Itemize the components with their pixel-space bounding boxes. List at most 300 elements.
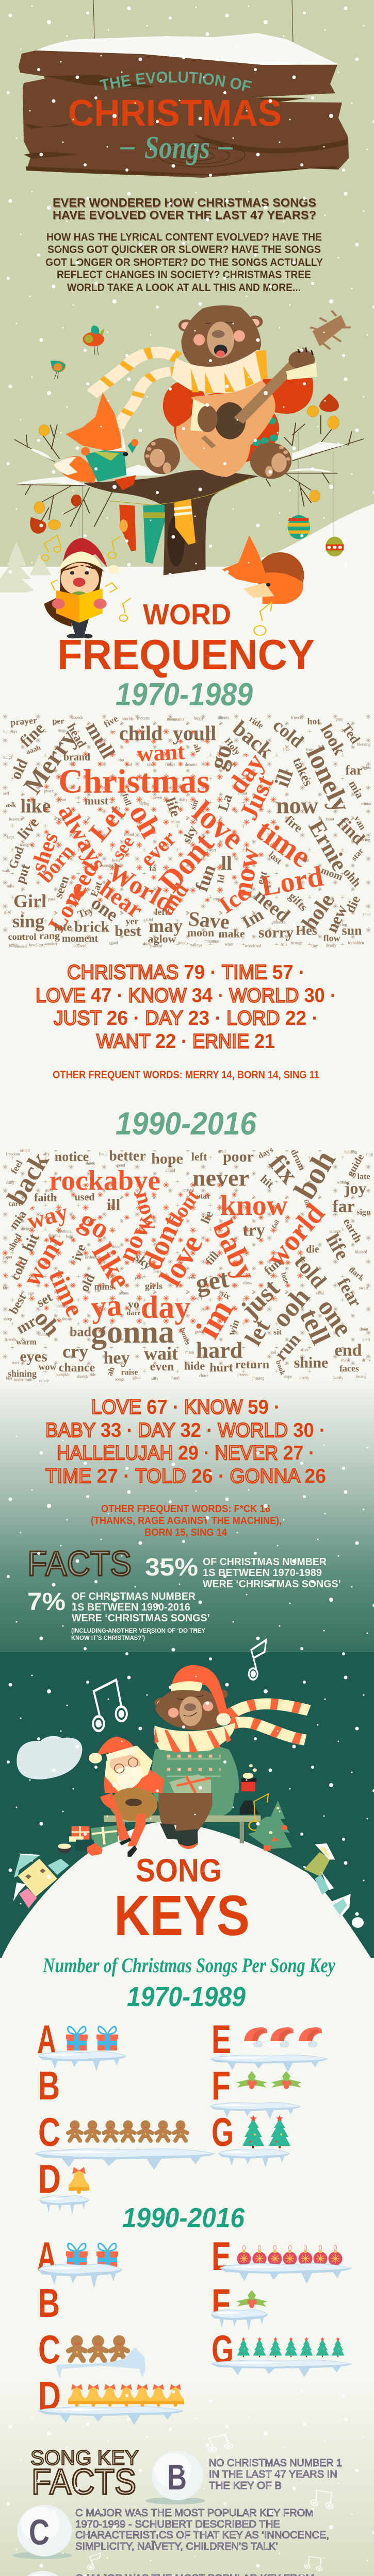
small filler words: mother	[46, 942, 58, 946]
small filler words: hold	[9, 943, 17, 948]
small filler words: strange	[290, 941, 303, 945]
word cloud 1990-2016: far	[332, 1197, 355, 1216]
small filler words: family	[333, 1376, 343, 1380]
word cloud 1990-2016: late	[357, 1173, 370, 1181]
word cloud 1970-1989: head	[64, 721, 89, 750]
wooden board	[19, 50, 349, 178]
word cloud 1990-2016: im	[189, 1293, 240, 1345]
small filler words: wondered	[245, 944, 261, 948]
small filler words: christmas	[204, 939, 219, 944]
word cloud 1970-1989: God	[6, 844, 27, 871]
word cloud 1990-2016: bad	[70, 1324, 91, 1340]
small filler words: salute	[39, 1379, 49, 1383]
small filler words: sweet	[207, 848, 217, 852]
word cloud 1970-1989: old	[7, 756, 31, 782]
word cloud 1990-2016: left	[191, 1150, 207, 1163]
word cloud 1990-2016: way	[24, 1198, 71, 1234]
stat: 7%: (INCLUDING ANOTHER VERSION OF ‘DO THEY	[71, 1627, 205, 1634]
small filler words: silence	[330, 1229, 342, 1233]
small filler words: daisy	[179, 798, 187, 802]
small filler words: ally	[43, 1152, 50, 1156]
sleeping fox	[222, 535, 304, 604]
falling snow over top section	[0, 0, 374, 574]
small filler words: sail	[270, 1350, 277, 1355]
word cloud 1990-2016: used	[75, 1192, 94, 1203]
word cloud 1990-2016: baby	[206, 1215, 263, 1286]
stat: 35%: 1S BETWEEN 1970-1989	[203, 1567, 322, 1579]
snow cap on sign	[36, 33, 337, 65]
word cloud 1990-2016: care	[8, 1200, 22, 1208]
word cloud 1990-2016: shed	[6, 1232, 23, 1252]
word cloud 1990-2016: cold	[7, 1254, 31, 1282]
small filler words: tho	[119, 757, 124, 762]
word cloud 1970-1989: put	[12, 862, 33, 886]
key chart 1990-2016	[37, 2233, 352, 2425]
word cloud 1970-1989: go	[204, 740, 238, 773]
key B: none: B	[38, 2063, 60, 2108]
stat: 7%: 7%	[27, 1588, 66, 1616]
snowball C and fact: CHARACTERISTICS OF THAT KEY AS ‘INNOCENCE,	[75, 2530, 329, 2541]
snowball B and fact: IN THE LAST 47 YEARS IN	[209, 2469, 337, 2480]
small filler words: shine	[143, 942, 152, 946]
word cloud 1970-1989: Dont	[152, 826, 220, 899]
small filler words: dreams	[185, 762, 197, 767]
stat: 35%	[145, 1554, 341, 1590]
word cloud 1990-2016: die	[306, 1244, 319, 1255]
faint background trees	[0, 541, 51, 592]
small filler words: sits	[147, 762, 152, 767]
small filler words: cry	[75, 795, 80, 800]
stat: 35%: 35%	[145, 1554, 198, 1581]
key F: 1 holly	[211, 2280, 268, 2331]
word cloud 1990-2016: day	[141, 1290, 190, 1325]
word cloud 1990-2016: win	[225, 1318, 242, 1337]
small filler words: beloved	[73, 944, 87, 948]
small filler words: hall	[281, 942, 287, 947]
small filler words: presents	[272, 920, 285, 924]
word cloud 1970-1989: aaah	[25, 744, 42, 756]
top word counts 1990-2016: HALLELUJAH 29 · NEVER 27 ·	[57, 1442, 315, 1464]
small filler words: shields	[77, 1375, 88, 1379]
cocoa mug	[241, 1778, 255, 1791]
word cloud 1990-2016: ill	[107, 1195, 120, 1214]
word cloud 1990-2016: dont	[136, 1210, 188, 1275]
bare branches	[14, 415, 364, 527]
word cloud 1970-1989: brand	[63, 752, 90, 763]
small filler words: stars	[12, 1360, 19, 1365]
other frequent words 1970-1989: OTHER FREQUENT WORDS: MERRY 14, BORN 14, SING 11	[53, 1069, 319, 1081]
small filler words: hand	[171, 1376, 180, 1381]
small filler words: cold	[363, 1337, 370, 1342]
intro paragraph	[45, 231, 323, 294]
small filler words: true	[306, 747, 313, 752]
word cloud 1990-2016: fear	[333, 1275, 365, 1311]
title: The Evolution of Christmas Songs: Songs	[144, 130, 210, 165]
word cloud 1990-2016: one	[313, 1293, 358, 1342]
snowball C and fact: C MAJOR WAS THE MOST POPULAR KEY FROM	[75, 2507, 314, 2519]
bench	[104, 1816, 261, 1822]
word cloud 1970-1989: ask	[6, 802, 16, 809]
key G: 7 trees: G	[212, 2327, 234, 2372]
word cloud 1970-1989: aglow	[148, 933, 176, 945]
heading: song key facts	[30, 2447, 139, 2502]
word cloud 1990-2016: hit	[20, 1231, 42, 1255]
small filler words: rings	[58, 728, 66, 733]
word cloud 1970-1989: day	[222, 749, 271, 799]
small filler words: pumpkin	[56, 1372, 70, 1377]
word cloud 1970-1989: may	[149, 916, 183, 936]
stat: 7%	[27, 1588, 210, 1641]
word cloud 1990-2016: hey	[103, 1349, 130, 1367]
word cloud 1990-2016: ah	[105, 1366, 117, 1377]
word cloud 1990-2016: best	[7, 1292, 29, 1316]
small filler words: fears	[153, 1269, 161, 1274]
small filler words: true	[214, 896, 220, 902]
word cloud 1970-1989: late	[54, 920, 72, 934]
word cloud 1970-1989: fire	[282, 814, 305, 836]
small filler words: bright	[299, 858, 310, 862]
word cloud 1990-2016: just	[235, 1273, 285, 1324]
guitar	[176, 379, 275, 477]
scarf streamers	[229, 1704, 309, 1715]
year label 1990-2016: 1990-2016	[116, 1106, 256, 1142]
word cloud 1970-1989: oh	[123, 798, 168, 843]
small filler words: gold	[195, 1329, 202, 1334]
fox on branch	[54, 456, 98, 483]
word cloud 1970-1989: moon	[187, 926, 214, 939]
small filler words	[3, 1148, 372, 1383]
small filler words: blessed	[355, 1250, 367, 1254]
intro paragraph: SONGS GOT QUICKER OR SLOWER? HAVE THE SONGS	[47, 244, 321, 256]
small filler words: self	[3, 791, 9, 795]
other frequent words 1990-2016: (THANKS, RAGE AGAINST THE MACHINE),	[91, 1515, 282, 1527]
word cloud 1970-1989: born	[34, 840, 79, 887]
title: The Evolution of Christmas Songs: THE EVOLUTION OF	[99, 71, 252, 91]
word cloud 1990-2016: tell	[294, 1304, 335, 1349]
word cloud 1990-2016: world	[260, 1197, 331, 1274]
small filler words: forbidden	[348, 941, 364, 945]
small filler words: fire	[95, 1288, 101, 1293]
snowball B and fact	[145, 2451, 342, 2504]
word cloud 1970-1989: one	[87, 892, 122, 925]
word cloud 1990-2016: shine	[294, 1354, 328, 1371]
small filler words: sailed	[20, 1148, 29, 1153]
word cloud 1970-1989: Christmas	[58, 762, 210, 801]
small filler words: dawn	[57, 798, 67, 802]
small filler words: loveliest	[29, 943, 43, 947]
word cloud 1970-1989: love	[186, 794, 251, 856]
word cloud 1970-1989: now	[276, 792, 318, 818]
stat: 7%: KNOW IT’S CHRISTMAS?’)	[71, 1634, 145, 1641]
word cloud 1970-1989: youll	[173, 721, 216, 745]
key B: none: B	[38, 2280, 60, 2326]
word cloud 1970-1989: full	[120, 792, 133, 807]
word cloud 1990-2016: star	[197, 1192, 210, 1200]
word cloud 1990-2016: end	[335, 1341, 362, 1360]
word cloud 1990-2016: yo	[128, 1297, 139, 1311]
word cloud 1990-2016: go	[74, 1204, 115, 1246]
small filler words: steady	[178, 941, 188, 945]
small filler words: friends	[5, 1337, 16, 1342]
intro question	[53, 196, 316, 222]
small filler words: dancing	[357, 838, 370, 842]
small filler words: mothers	[58, 1229, 71, 1233]
word cloud 1990-2016: now	[131, 1189, 164, 1233]
word cloud 1990-2016: ive	[69, 1242, 89, 1263]
word cloud 1970-1989: sing	[12, 911, 44, 931]
word cloud 1970-1989: ah	[191, 742, 203, 754]
bear head and hat	[155, 1698, 168, 1708]
word cloud 1990-2016: sit	[273, 1328, 282, 1336]
word cloud 1990-2016: never	[192, 1164, 249, 1191]
word cloud 1990-2016: book	[274, 1360, 286, 1377]
word cloud 1990-2016: know	[220, 1190, 288, 1222]
word cloud 1970-1989: Ernie	[304, 816, 352, 875]
word cloud 1990-2016: chance	[59, 1361, 95, 1375]
snow on branches	[17, 442, 346, 486]
small filler words: spend	[116, 1163, 125, 1167]
present on lap	[169, 1774, 211, 1793]
snowball B and fact: NO CHRISTMAS NUMBER 1	[209, 2458, 342, 2469]
heading: word frequency: WORD	[143, 598, 231, 631]
word cloud 1990-2016: now	[112, 1212, 157, 1266]
word cloud 1990-2016: girls	[145, 1281, 162, 1291]
word cloud 1970-1989: Hes	[296, 923, 317, 938]
key C: 7 gingerbread: C	[38, 2109, 60, 2155]
key A: 2 gifts: A	[37, 2016, 56, 2062]
snowball C and fact: SIMPLICITY, NAÏVETY, CHILDREN’S TALK’	[75, 2541, 278, 2552]
small filler words: ring	[366, 1152, 372, 1156]
small filler words: chasing	[252, 1376, 264, 1381]
small filler words: pray	[336, 717, 343, 721]
word cloud 1990-2016: dark	[347, 1265, 366, 1283]
small filler words: pretty	[300, 1376, 309, 1380]
word cloud 1970-1989: sky	[180, 824, 200, 845]
word cloud 1990-2016: even	[150, 1360, 174, 1374]
small filler words: alive	[300, 1348, 308, 1352]
word cloud 1970-1989: die	[343, 893, 363, 915]
heading: word frequency	[57, 598, 315, 679]
key C: 7 gingerbread	[35, 2109, 216, 2170]
other frequent words 1990-2016	[91, 1503, 282, 1538]
word cloud 1970-1989: hot	[307, 716, 320, 726]
small filler words: draw	[228, 762, 236, 767]
other frequent words 1990-2016: OTHER FREQUENT WORDS: F*CK 16	[101, 1503, 270, 1515]
small filler words: gold	[45, 1188, 53, 1192]
small filler words: bells	[112, 858, 120, 862]
key G: 2 trees	[212, 2109, 290, 2168]
small filler words: mountains	[167, 717, 184, 721]
facts block	[27, 1544, 341, 1641]
word cloud 1990-2016: life	[321, 1230, 353, 1263]
small filler words: freedom	[6, 1152, 20, 1156]
small filler words: walk	[2, 869, 10, 873]
small filler words: dying	[140, 802, 149, 806]
small filler words: white	[225, 942, 234, 947]
snowball B and fact: THE KEY OF B	[209, 2480, 282, 2492]
word cloud 1970-1989: sorry	[258, 924, 294, 941]
yellow note	[254, 1794, 268, 1821]
word cloud 1970-1989: new	[322, 902, 351, 936]
word cloud 1970-1989: World	[103, 857, 178, 917]
small filler words: thanks	[39, 1332, 49, 1336]
word cloud 1990-2016: hard	[196, 1337, 242, 1363]
word cloud 1970-1989: mia	[346, 778, 367, 801]
small filler words: tiny	[312, 944, 318, 948]
music notes	[93, 1680, 127, 1731]
key A: 2 gifts	[37, 2016, 126, 2071]
word cloud 1970-1989	[2, 713, 372, 949]
snowball C and fact	[12, 2505, 329, 2559]
word cloud 1990-2016: faces	[339, 1363, 359, 1374]
top word counts 1970-1989: LOVE 47 · KNOW 34 · WORLD 30 ·	[36, 985, 336, 1007]
word cloud 1970-1989: time	[250, 812, 317, 874]
word cloud 1990-2016: old	[77, 1272, 98, 1294]
heading: song keys: KEYS	[114, 1884, 250, 1947]
top word counts 1970-1989	[36, 961, 336, 1053]
word cloud 1990-2016: set	[34, 1290, 55, 1310]
heading: song keys: SONG	[136, 1853, 222, 1889]
word cloud 1970-1989: Love	[43, 879, 91, 936]
word cloud 1990-2016: warm	[16, 1337, 37, 1347]
key A: 2 gifts: A	[37, 2233, 56, 2279]
word cloud 1970-1989: Lord	[258, 860, 326, 903]
key chart 1970-1989	[35, 2016, 328, 2215]
word cloud 1990-2016: return	[235, 1358, 269, 1371]
small filler words: songs	[115, 1377, 124, 1382]
intro paragraph: HOW HAS THE LYRICAL CONTENT EVOLVED? HAVE THE	[46, 231, 322, 243]
word cloud 1970-1989: ever	[136, 827, 181, 871]
word cloud 1970-1989: want	[136, 739, 186, 767]
small filler words: tonight	[20, 843, 32, 847]
stat: 7%: OF CHRISTMAS NUMBER	[72, 1591, 196, 1602]
word cloud 1990-2016: like	[86, 1238, 138, 1294]
small filler words: dishonest	[85, 1255, 101, 1259]
small filler words: pass	[48, 896, 55, 902]
word cloud 1990-2016: sky	[132, 1251, 154, 1273]
year label 1990-2016 keys: 1990-2016	[122, 2202, 245, 2233]
word cloud 1970-1989: fa	[149, 865, 156, 873]
key D: 1 bell: D	[38, 2156, 61, 2201]
heading: word frequency: FREQUENCY	[57, 631, 315, 679]
word cloud 1990-2016: faith	[34, 1191, 57, 1204]
title: The Evolution of Christmas Songs: CHRISTMAS	[68, 93, 282, 134]
word cloud 1990-2016: hit	[258, 1172, 277, 1191]
word cloud 1970-1989: mull	[81, 718, 119, 762]
word cloud 1990-2016: dont	[162, 1185, 204, 1231]
word cloud 1990-2016: sign	[356, 1208, 371, 1217]
presents	[72, 1826, 89, 1840]
word cloud 1990-2016: hope	[151, 1150, 183, 1167]
hanging ornaments	[83, 432, 334, 539]
bear sweater lower	[153, 1793, 235, 1818]
word cloud 1970-1989: per	[52, 717, 64, 725]
small filler words: faith	[327, 896, 334, 902]
top word counts 1970-1989: JUST 26 · DAY 23 · LORD 22 ·	[54, 1007, 318, 1029]
word cloud 1990-2016: love	[153, 1229, 209, 1292]
music notes around girl	[42, 535, 272, 635]
small filler words: happy	[193, 716, 204, 720]
small filler words: lights	[362, 766, 371, 770]
small filler words: worlds	[122, 716, 134, 721]
word cloud 1970-1989: Just	[234, 771, 279, 824]
small filler words: rolls	[7, 884, 14, 888]
small filler words	[2, 715, 372, 949]
small filler words: stand	[109, 941, 118, 945]
key D: 7 bells	[38, 2373, 184, 2425]
small filler words: blessing	[357, 742, 370, 747]
falling snow over teal section	[0, 1422, 374, 1958]
word cloud 1970-1989: ill	[270, 766, 298, 790]
small filler words: paper	[3, 1255, 12, 1259]
word cloud 1970-1989: ll	[221, 853, 232, 874]
word cloud 1970-1989: Holy	[222, 736, 243, 757]
small filler words: loving	[356, 1375, 366, 1379]
key E: 7 baubles	[212, 2233, 352, 2284]
word cloud 1970-1989: ohh	[340, 866, 363, 890]
word cloud 1970-1989: find	[333, 814, 368, 849]
word cloud 1990-2016: better	[109, 1148, 146, 1164]
small filler words: sleep	[4, 1317, 12, 1321]
small filler words: holding	[56, 1303, 68, 1309]
small filler words: hold	[66, 1234, 73, 1239]
small filler words: flakes	[165, 762, 175, 767]
small filler words: kept	[7, 835, 14, 840]
word cloud 1970-1989: van	[352, 814, 368, 832]
word cloud 1970-1989: hear	[95, 875, 148, 923]
small filler words: thank	[185, 1350, 194, 1355]
word cloud 1990-2016: six	[219, 1289, 232, 1301]
word cloud 1970-1989: must	[85, 794, 109, 807]
word cloud 1990-2016: wait	[144, 1343, 178, 1364]
stat: 7%: 1S BETWEEN 1990-2016	[72, 1602, 190, 1613]
small filler words: dearly	[326, 943, 336, 948]
word cloud 1990-2016: wow	[38, 1362, 57, 1372]
word cloud 1990-2016: ya	[89, 1288, 123, 1324]
small filler words: heavens	[9, 817, 22, 821]
snowball B and fact: B	[167, 2457, 187, 2497]
heading: song keys	[114, 1853, 250, 1947]
small filler words: seems	[119, 1291, 129, 1295]
word cloud 1990-2016: fix	[264, 1149, 304, 1189]
small filler words: kings	[3, 755, 12, 759]
small filler words: away	[249, 894, 257, 899]
cloud	[17, 1736, 83, 1780]
hanging wooden title sign	[19, 0, 349, 178]
small filler words: friends	[291, 715, 302, 720]
word cloud 1970-1989: Ted	[338, 721, 363, 747]
word cloud 1990-2016: wont	[17, 1229, 69, 1291]
small filler words: peace	[44, 788, 54, 793]
word cloud 1990-2016: back	[2, 1147, 55, 1210]
word cloud 1990-2016: shining	[8, 1368, 37, 1379]
word cloud 1970-1989: mom	[319, 865, 344, 883]
scarf streamers	[92, 352, 177, 394]
key G: 7 trees	[211, 2327, 352, 2377]
heading: song key facts: FACTS	[31, 2462, 136, 2502]
snowball C and fact: C	[29, 2512, 50, 2552]
word cloud 1970-1989: child	[119, 721, 162, 745]
word cloud 1990-2016: let	[240, 1315, 275, 1350]
small filler words: giant	[133, 1376, 141, 1380]
word cloud 1970-1989: five	[102, 713, 120, 730]
small filler words: illinois	[218, 715, 229, 720]
small filler words: round	[124, 833, 134, 837]
small filler words: steps	[284, 1375, 292, 1379]
word cloud 1970-1989: seen	[52, 874, 72, 900]
word cloud 1970-1989: need	[250, 885, 294, 927]
small filler words: sad	[126, 762, 132, 767]
